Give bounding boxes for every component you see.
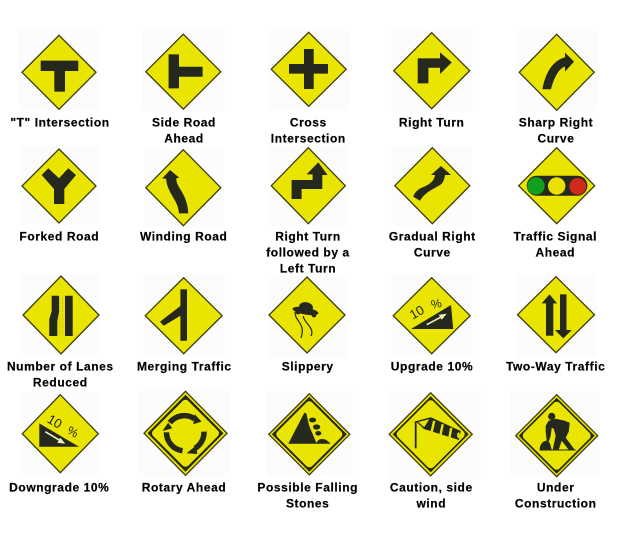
icon: upgrade sign: 10 — [407, 302, 427, 322]
icon: cross intersection sign — [268, 30, 350, 110]
panel: T Intersection — [10, 29, 110, 130]
label: Right Turn followed by a Left Turn: Left Turn — [280, 262, 336, 276]
label: Forked Road: Forked Road — [19, 230, 99, 244]
label: Caution, side wind: Caution, side — [390, 481, 473, 495]
panel: Forked Road — [19, 146, 99, 244]
icon: falling stones sign — [266, 391, 352, 477]
label: Under Construction: Construction — [515, 497, 597, 511]
icon: slippery road sign — [268, 276, 347, 358]
icon: two-way traffic sign — [517, 275, 597, 357]
label: Number of Lanes Reduced: Reduced — [33, 376, 88, 390]
icon: downgrade sign: % — [65, 423, 81, 441]
label: Slippery: Slippery — [282, 360, 334, 374]
label: Sharp Right Curve: Sharp Right — [519, 116, 593, 130]
label: Side Road Ahead: Side Road — [152, 116, 216, 130]
icon: merging traffic sign — [144, 274, 225, 356]
panel: Winding Road — [140, 147, 227, 244]
label: Sharp Right Curve: Curve — [538, 132, 574, 146]
label: Right Turn followed by a Left Turn: Right Turn — [275, 230, 341, 244]
label: Traffic Signal Ahead: Ahead — [536, 246, 575, 260]
icon: gradual right curve sign — [391, 146, 471, 226]
icon: side road sign — [142, 29, 224, 112]
label: Number of Lanes Reduced: Number of Lanes — [7, 360, 114, 374]
label: Winding Road: Winding Road — [140, 230, 227, 244]
label: Right Turn: Right Turn — [399, 116, 464, 130]
icon: forked road sign — [20, 146, 99, 225]
panel: Traffic Signal Ahead — [514, 148, 597, 260]
panel: Side Road Ahead — [142, 29, 224, 146]
label: Traffic Signal Ahead: Traffic Signal — [514, 230, 597, 244]
icon: downgrade sign — [20, 393, 100, 474]
label: Side Road Ahead: Ahead — [164, 132, 204, 146]
label: Two-Way Traffic: Two-Way Traffic — [506, 360, 605, 374]
panel: Cross Intersection — [268, 30, 350, 146]
icon: rotary sign — [138, 390, 230, 478]
panel: Caution, side wind — [387, 391, 481, 511]
panel: Right Turn — [391, 30, 473, 130]
label: Downgrade 10%: Downgrade 10% — [9, 481, 109, 495]
icon: side wind sign — [387, 391, 481, 479]
label: Right Turn followed by a Left Turn: followed by a — [266, 246, 350, 260]
panel: Possible Falling Stones — [257, 391, 358, 511]
label: T Intersection: "T" Intersection — [10, 116, 110, 130]
panel: Under Construction — [510, 392, 600, 511]
panel: Number of Lanes Reduced — [7, 274, 114, 390]
label: Rotary Ahead: Rotary Ahead — [142, 481, 226, 495]
panel: Merging Traffic — [137, 274, 232, 374]
panel: Rotary Ahead — [138, 390, 230, 495]
label: Possible Falling Stones: Stones — [286, 497, 329, 511]
icon: traffic signal sign — [519, 148, 595, 224]
icon: upgrade sign: % — [430, 296, 443, 312]
panel: Sharp Right Curve — [516, 30, 598, 146]
label: Under Construction: Under — [537, 481, 574, 495]
label: Caution, side wind: wind — [415, 497, 446, 511]
label: Cross Intersection: Cross — [290, 116, 327, 130]
icon: construction worker sign — [510, 392, 600, 477]
panel: Slippery — [268, 276, 347, 374]
panel: Downgrade 10% — [9, 393, 109, 495]
panel: Gradual Right Curve — [389, 146, 476, 260]
label: Merging Traffic: Merging Traffic — [137, 360, 232, 374]
icon: downgrade sign: 10 — [45, 411, 65, 432]
icon: right turn sign — [391, 30, 473, 112]
panel: Right Turn followed by a Left Turn — [266, 146, 350, 276]
label: Upgrade 10%: Upgrade 10% — [391, 360, 473, 374]
label: Possible Falling Stones: Possible Falling — [257, 481, 358, 495]
label: Gradual Right Curve: Gradual Right — [389, 230, 476, 244]
icon: T intersection sign — [18, 29, 100, 110]
label: Cross Intersection: Intersection — [271, 132, 346, 146]
icon: lanes reduced sign — [20, 274, 100, 356]
icon: upgrade sign — [392, 274, 473, 357]
panel: Upgrade 10% — [391, 274, 473, 374]
panel: Two-Way Traffic — [506, 275, 605, 374]
icon: sharp right curve sign — [516, 30, 598, 111]
label: Gradual Right Curve: Curve — [414, 246, 451, 260]
icon: winding road sign — [144, 147, 223, 228]
icon: right then left turn sign — [267, 146, 348, 226]
